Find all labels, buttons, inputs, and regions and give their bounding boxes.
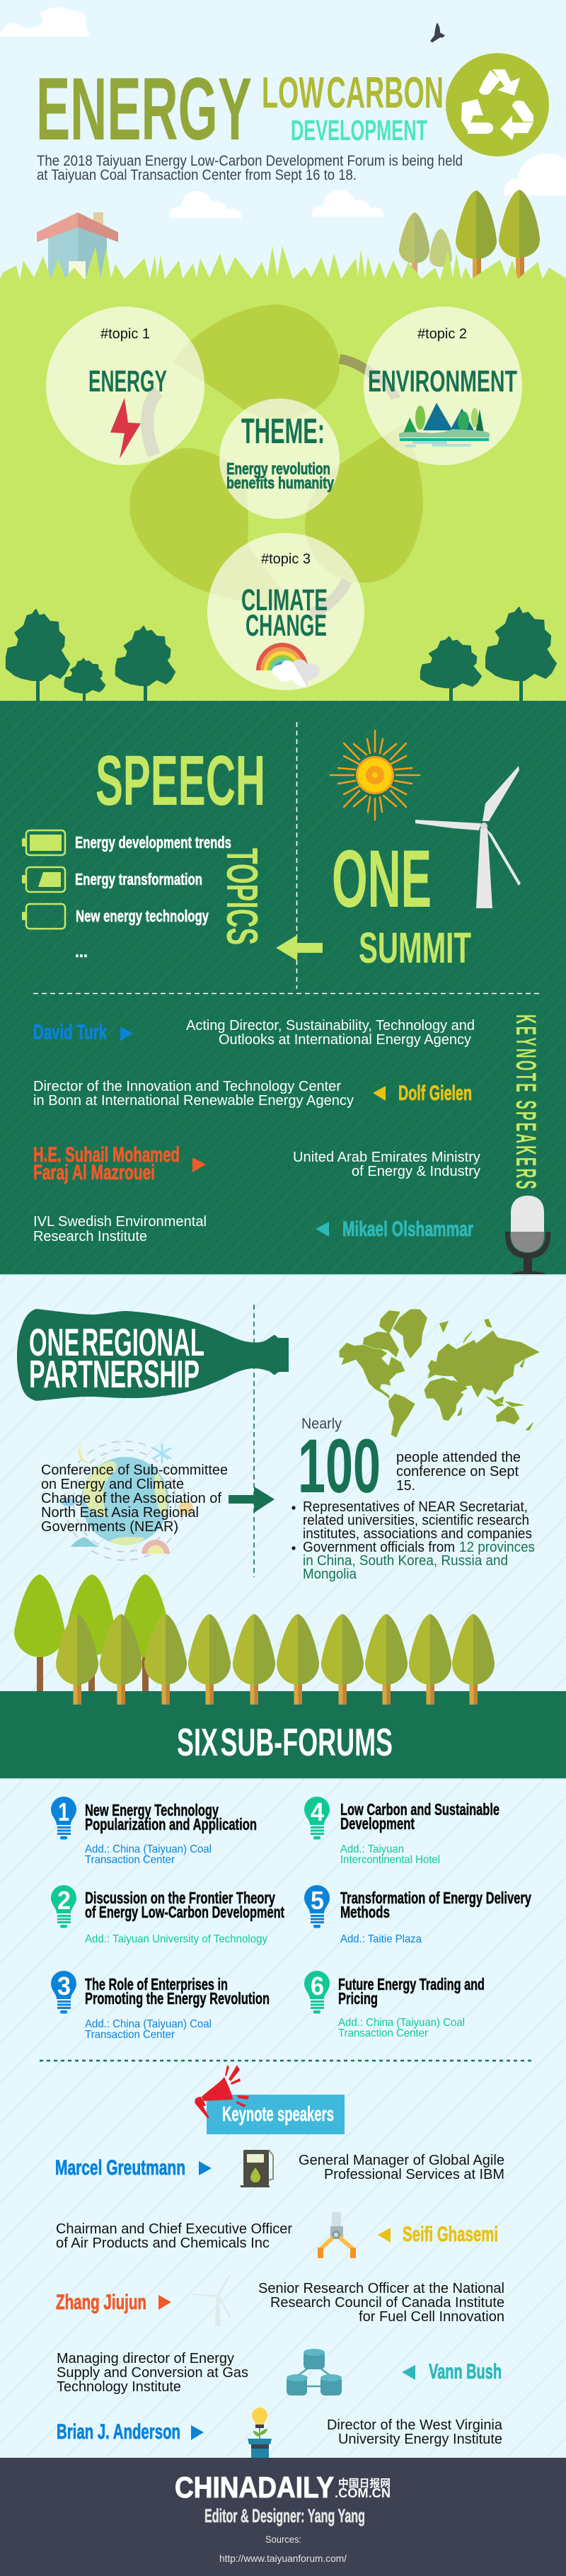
forum 4: Development bbox=[340, 1814, 415, 1833]
icon: bulb 3 bbox=[51, 1971, 76, 2013]
panel: topic 1 energy bbox=[46, 307, 204, 465]
icon: bulb 6 bbox=[304, 1971, 330, 2013]
text: people attended: 15. bbox=[396, 1478, 415, 1494]
front row of trees bbox=[56, 1614, 495, 1705]
forum 4 bbox=[304, 1797, 499, 1866]
bullet list: institutes, associations and companies bbox=[303, 1526, 532, 1542]
forum 6 bbox=[304, 1971, 485, 2039]
icon: fuel pump bbox=[241, 2150, 273, 2187]
icon: robot claw bbox=[318, 2212, 356, 2258]
speaker: Dolf Gielen bbox=[33, 1079, 472, 1109]
speaker: David Turk: Outlooks at International Energy Agency bbox=[219, 1032, 471, 1048]
address: Add.: Taiyuan University of Technology bbox=[85, 1933, 267, 1945]
logo: CHINADAILY bbox=[175, 2471, 334, 2504]
forum 3: Promoting the Energy Revolution bbox=[85, 1989, 270, 2008]
banner: bottle heading: PARTNERSHIP bbox=[29, 1352, 200, 1396]
forum 6: Pricing bbox=[338, 1989, 378, 2008]
item text: Energy development trends bbox=[75, 833, 231, 852]
speaker: Mikael Olshammar: Research Institute bbox=[33, 1229, 147, 1244]
speaker: Zhang Jiujun bbox=[56, 2274, 504, 2326]
footer panel: http://www.taiyuanforum.com/ bbox=[219, 2553, 347, 2564]
icon: bulb 5 bbox=[304, 1885, 330, 1928]
heading: SPEECH: SPEECH bbox=[96, 741, 265, 820]
bullet list bbox=[291, 1499, 535, 1582]
icon: house bbox=[37, 212, 118, 280]
bullet list: related universities, scientific research bbox=[303, 1513, 529, 1528]
speaker: Vann Bush: Technology Institute bbox=[57, 2379, 181, 2395]
speaker: Dolf Gielen: Director of the Innovation and Technology Center bbox=[33, 1079, 341, 1094]
editor credit: Editor & Designer: Yang Yang bbox=[204, 2505, 365, 2526]
text: people attended: people attended the bbox=[396, 1450, 521, 1465]
speaker: Vann Bush: Managing director of Energy bbox=[57, 2351, 234, 2366]
address: Add.: China (Taiyuan) Coal bbox=[85, 1843, 212, 1855]
bullet list: 12 provinces bbox=[459, 1540, 535, 1555]
intro text bbox=[37, 153, 463, 183]
speaker: Brian J. Anderson bbox=[57, 2408, 503, 2458]
heading: #topic 1 bbox=[100, 326, 150, 342]
panel: topic 2 environment bbox=[364, 307, 522, 465]
speaker: Dolf Gielen: Dolf Gielen bbox=[398, 1082, 472, 1105]
icon: cloud top left bbox=[0, 7, 89, 37]
forum 1: 1 bbox=[58, 1797, 69, 1826]
title: ENERGY: ENERGY bbox=[36, 60, 252, 159]
forum 4: Intercontinental Hotel bbox=[340, 1854, 440, 1866]
forum 2 bbox=[51, 1885, 284, 1945]
speaker: Marcel Greutmann bbox=[55, 2150, 504, 2187]
forum 1: Transaction Center bbox=[85, 1854, 175, 1866]
address: Add.: China (Taiyuan) Coal bbox=[338, 2017, 465, 2029]
speaker: Vann Bush: Vann Bush bbox=[429, 2360, 502, 2383]
title: LOW CARBON: LOW CARBON bbox=[262, 69, 444, 118]
illustration: faded globe bbox=[62, 1441, 193, 1560]
dashed divider bbox=[33, 992, 540, 994]
heading: ONE: ONE bbox=[332, 834, 432, 925]
grass hill bbox=[0, 246, 566, 704]
text: NEAR conference: on Energy and Climate bbox=[41, 1477, 184, 1492]
bullet list: Mongolia bbox=[303, 1567, 357, 1582]
topic name: CLIMATE bbox=[241, 583, 328, 617]
banner: bottle heading: ONE REGIONAL bbox=[29, 1320, 204, 1364]
speaker: H.E. Suhail Mohamed Faraj Al Mazrouei: of Energy & Industry bbox=[352, 1164, 480, 1179]
heading: #topic 3 bbox=[261, 551, 311, 567]
section top edge bbox=[0, 1274, 566, 1276]
speaker: Seifi Ghasemi bbox=[56, 2212, 498, 2258]
forum 1: Popularization and Application bbox=[85, 1815, 257, 1833]
arrow: to results bbox=[229, 1487, 275, 1513]
speaker: Seifi Ghasemi: Seifi Ghasemi bbox=[403, 2223, 498, 2246]
forum 3: Transaction Center bbox=[85, 2029, 175, 2041]
stat: 100: 100 bbox=[298, 1423, 381, 1509]
item text: Energy transformation bbox=[75, 870, 202, 888]
speaker: Marcel Greutmann: General Manager of Global Agile bbox=[299, 2153, 504, 2168]
speaker: H.E. Suhail Mohamed Faraj Al Mazrouei: United Arab Emirates Ministry bbox=[293, 1150, 480, 1165]
trees on the hill bbox=[399, 190, 540, 279]
forest silhouettes bbox=[6, 607, 556, 702]
icon: bulb 2 bbox=[51, 1885, 76, 1928]
forum 5: Methods bbox=[340, 1903, 390, 1921]
address: Add.: Taiyuan bbox=[340, 1843, 404, 1855]
speaker: Brian J. Anderson: University Energy Institute bbox=[338, 2432, 502, 2447]
topic name: ENERGY bbox=[88, 365, 167, 399]
speaker: H.E. Suhail Mohamed Faraj Al Mazrouei: H.E. Suhail Mohamed bbox=[33, 1143, 180, 1167]
bullet list: in China, South Korea, Russia and bbox=[303, 1553, 508, 1569]
forum 3: 3 bbox=[57, 1971, 71, 2000]
arrow: to topics bbox=[276, 935, 323, 961]
forum 5 bbox=[304, 1885, 531, 1945]
icon: bird bbox=[430, 23, 445, 42]
speaker: David Turk: David Turk bbox=[33, 1021, 107, 1044]
icon: battery half bbox=[22, 867, 65, 892]
forum 4: 4 bbox=[311, 1797, 324, 1826]
speaker: David Turk: Acting Director, Sustainability, Technology and bbox=[186, 1018, 475, 1034]
section edge bbox=[0, 1778, 566, 1780]
icon: rainbow bbox=[256, 643, 320, 687]
speaker: Seifi Ghasemi: of Air Products and Chemicals Inc bbox=[56, 2236, 270, 2251]
heading: SUMMIT: SUMMIT bbox=[359, 924, 471, 972]
address: Add.: Taitie Plaza bbox=[340, 1933, 422, 1945]
forum 3 bbox=[51, 1971, 270, 2041]
text: NEAR conference bbox=[41, 1462, 228, 1535]
bullet list: Government officials from bbox=[303, 1540, 455, 1555]
propeller: turbine blades behind the circles bbox=[129, 304, 423, 614]
title: DEVELOPMENT: DEVELOPMENT bbox=[291, 114, 427, 147]
panel: dark green summit section bbox=[0, 701, 566, 1274]
title: Future Energy Trading and bbox=[338, 1975, 485, 1993]
speaker: Zhang Jiujun: Senior Research Officer at the National bbox=[258, 2281, 504, 2296]
icon: megaphone bbox=[195, 2065, 249, 2118]
icon: faint wind turbine bbox=[192, 2274, 231, 2326]
theme text: Energy revolution bbox=[226, 459, 330, 478]
speaker: H.E. Suhail Mohamed Faraj Al Mazrouei: Faraj Al Mazrouei bbox=[33, 1161, 155, 1184]
keynote speakers label bbox=[195, 2065, 345, 2134]
speaker: Zhang Jiujun: for Fuel Cell Innovation bbox=[359, 2309, 504, 2325]
text: NEAR conference: Conference of Sub-committee bbox=[41, 1462, 228, 1478]
ellipsis: ... bbox=[75, 942, 88, 961]
icon: battery full bbox=[22, 830, 65, 855]
speaker: Marcel Greutmann: Marcel Greutmann bbox=[55, 2156, 185, 2180]
forum 2: 2 bbox=[57, 1886, 71, 1915]
icon: sun bbox=[330, 731, 420, 820]
speaker: Brian J. Anderson: Brian J. Anderson bbox=[57, 2420, 180, 2444]
icon: world map bbox=[340, 1310, 539, 1437]
heading: SIX SUB-FORUMS bbox=[177, 1720, 393, 1764]
forum 2: of Energy Low-Carbon Development bbox=[85, 1903, 284, 1921]
panel: six sub-forums banner bbox=[0, 1691, 566, 1778]
title: The Role of Enterprises in bbox=[85, 1975, 228, 1993]
vertical label: TOPICS: TOPICS bbox=[217, 848, 266, 945]
icon: bulb 4 bbox=[304, 1797, 330, 1839]
title: Low Carbon and Sustainable bbox=[340, 1800, 499, 1819]
dashed divider bbox=[253, 1305, 255, 1577]
speaker: Mikael Olshammar: IVL Swedish Environmental bbox=[33, 1214, 207, 1230]
speaker: Vann Bush bbox=[57, 2349, 502, 2395]
bullet list: Representatives of NEAR Secretariat, bbox=[303, 1499, 528, 1515]
speaker: Marcel Greutmann: Professional Services at IBM bbox=[324, 2167, 504, 2182]
text: NEAR conference: Change of the Association of bbox=[41, 1491, 221, 1506]
icon: microphone bbox=[505, 1196, 550, 1274]
icon: battery empty bbox=[22, 904, 65, 929]
speaker: Seifi Ghasemi: Chairman and Chief Executive Officer bbox=[56, 2221, 292, 2237]
icon: plant bulb bbox=[248, 2408, 272, 2458]
dashed divider bbox=[40, 2060, 531, 2061]
heading: #topic 2 bbox=[417, 326, 467, 342]
forum 1 bbox=[51, 1797, 257, 1866]
text: people attended bbox=[396, 1450, 521, 1494]
speaker: Dolf Gielen: in Bonn at International Renewable Energy Agency bbox=[33, 1093, 354, 1109]
text: KEYNOTE SPEAKERS bbox=[510, 1014, 541, 1191]
panel: theme bbox=[219, 399, 340, 519]
intro text: at Taiyuan Coal Transaction Center from Sept 16 to 18. bbox=[37, 167, 357, 183]
item text: New energy technology bbox=[76, 907, 209, 925]
forum 6: 6 bbox=[311, 1971, 324, 2000]
icon: lightning bolt bbox=[110, 398, 141, 459]
icon: recycle badge bbox=[446, 53, 549, 156]
speaker: Zhang Jiujun: Research Council of Canada Institute bbox=[270, 2295, 504, 2311]
panel: topic 3 climate change bbox=[207, 533, 364, 690]
text: people attended: conference on Sept bbox=[396, 1464, 519, 1479]
speaker: Brian J. Anderson: Director of the West Virginia bbox=[327, 2417, 503, 2433]
icon: database network bbox=[287, 2349, 342, 2395]
panel: topic 3 climate change: CHANGE bbox=[246, 609, 327, 643]
text: Nearly: Nearly bbox=[301, 1416, 342, 1432]
panel: theme: benefits humanity bbox=[226, 474, 334, 492]
panel: light section background bbox=[0, 1274, 566, 1750]
address: Add.: China (Taiyuan) Coal bbox=[85, 2018, 212, 2030]
forum 6: Transaction Center bbox=[338, 2027, 429, 2039]
clouds bbox=[170, 154, 566, 218]
label text: Keynote speakers bbox=[222, 2103, 334, 2126]
list: speech topics bbox=[22, 830, 231, 961]
text: NEAR conference: Governments (NEAR) bbox=[41, 1519, 178, 1535]
sources: Sources: bbox=[265, 2534, 301, 2545]
footer panel bbox=[0, 2458, 566, 2576]
title: Discussion on the Frontier Theory bbox=[85, 1889, 275, 1907]
panel: lower light section background bbox=[0, 1778, 566, 2458]
speaker: Zhang Jiujun: Zhang Jiujun bbox=[56, 2291, 146, 2314]
intro text: The 2018 Taiyuan Energy Low-Carbon Development Forum is being held bbox=[37, 153, 463, 169]
icon: mountain landscape bbox=[399, 403, 490, 447]
icon: bulb 1 bbox=[51, 1797, 76, 1839]
text: NEAR conference: North East Asia Regional bbox=[41, 1505, 199, 1521]
speaker: Mikael Olshammar: Mikael Olshammar bbox=[342, 1218, 473, 1241]
banner: bottle heading bbox=[17, 1309, 289, 1401]
speaker: David Turk bbox=[33, 1018, 475, 1048]
icon: wind turbine bbox=[415, 766, 521, 908]
sky background bbox=[0, 0, 566, 283]
heading: THEME: bbox=[241, 411, 325, 451]
back row of trees bbox=[14, 1574, 170, 1693]
forum 5: 5 bbox=[311, 1886, 324, 1915]
title: New Energy Technology bbox=[85, 1801, 219, 1819]
speaker: Vann Bush: Supply and Conversion at Gas bbox=[57, 2365, 248, 2381]
speaker: Mikael Olshammar bbox=[33, 1214, 473, 1244]
dashed divider bbox=[296, 722, 297, 989]
logo: 中国日报网 bbox=[338, 2477, 391, 2490]
logo: .COM.CN bbox=[335, 2486, 391, 2500]
speaker: H.E. Suhail Mohamed Faraj Al Mazrouei bbox=[33, 1143, 480, 1184]
